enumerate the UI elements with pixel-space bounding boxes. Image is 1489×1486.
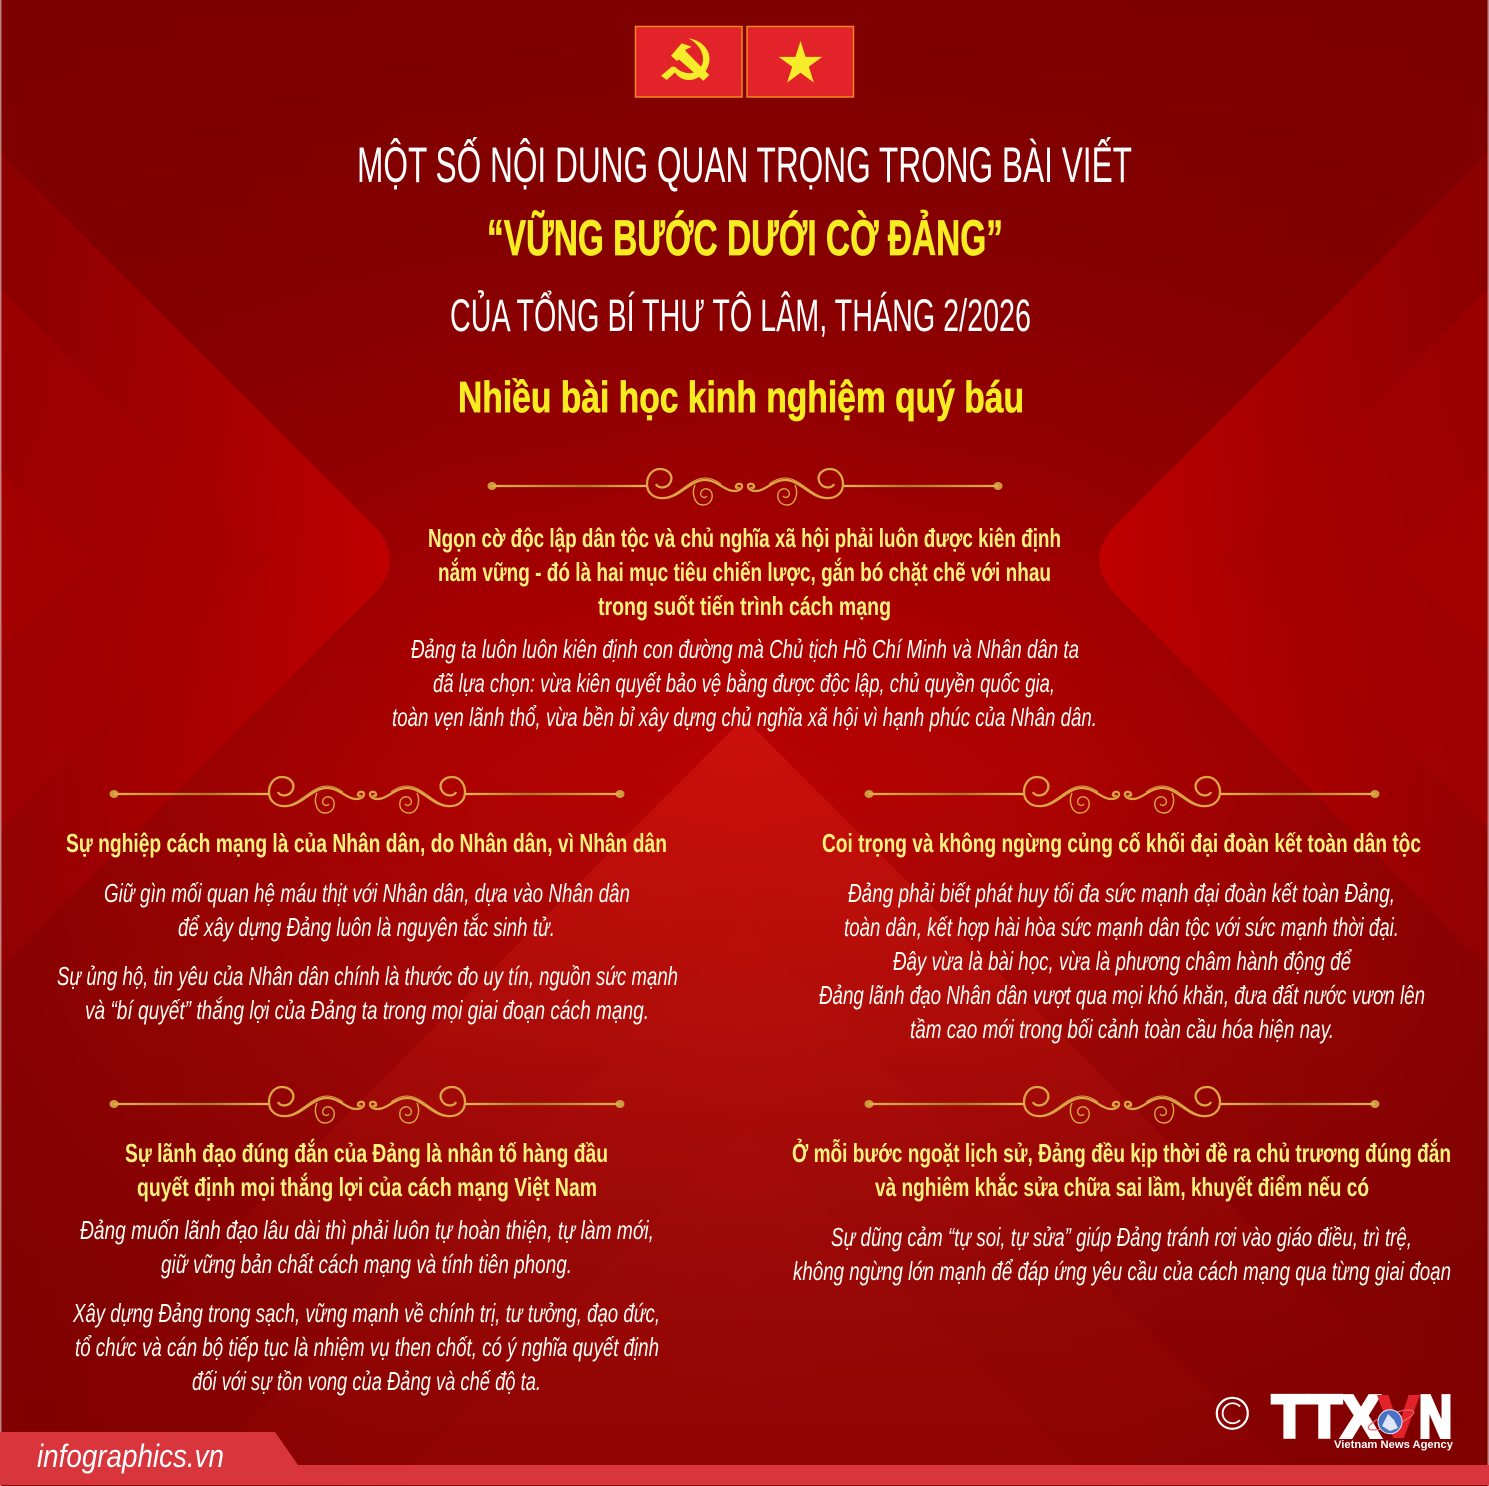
panel: lesson 4: [72, 1087, 660, 1396]
panel: lesson 4: tổ chức và cán bộ tiếp tục là nhiệm vụ then chốt, có ý nghĩa quyết định: [75, 1332, 659, 1362]
panel: lesson 1: đã lựa chọn: vừa kiên quyết bảo vệ bằng được độc lập, chủ quyền quốc gia,: [433, 668, 1055, 698]
panel: lesson 2: Sự ủng hộ, tin yêu của Nhân dân chính là thước đo uy tín, nguồn sức mạnh: [57, 961, 678, 991]
panel: lesson 4: Đảng muốn lãnh đạo lâu dài thì phải luôn tự hoàn thiện, tự làm mới,: [80, 1215, 654, 1245]
panel: lesson 2: [57, 777, 678, 1025]
panel: lesson 2: Sự nghiệp cách mạng là của Nhân dân, do Nhân dân, vì Nhân dân: [66, 828, 667, 858]
icon: party flag with hammer and sickle: [636, 26, 742, 97]
title: [357, 136, 1132, 341]
logo: TTXVN: N: [1419, 1384, 1452, 1450]
panel: lesson 3: [819, 777, 1425, 1044]
panel: lesson 1: [392, 469, 1097, 732]
panel: lesson 1: Ngọn cờ độc lập dân tộc và chủ nghĩa xã hội phải luôn được kiên định: [428, 523, 1061, 553]
panel: lesson 2: Giữ gìn mối quan hệ máu thịt với Nhân dân, dựa vào Nhân dân: [104, 878, 630, 908]
icon: national flag with star: [747, 26, 854, 97]
panel: lesson 2: và “bí quyết” thắng lợi của Đảng ta trong mọi giai đoạn cách mạng.: [85, 995, 649, 1025]
panel: lesson 1: toàn vẹn lãnh thổ, vừa bền bỉ xây dựng chủ nghĩa xã hội vì hạnh phúc của Nhân dân.: [392, 702, 1097, 732]
logo: TTXVN: TTX: [1272, 1384, 1380, 1450]
panel: lesson 4: Xây dựng Đảng trong sạch, vững mạnh về chính trị, tư tưởng, đạo đức,: [72, 1298, 660, 1328]
footer bar: [0, 1432, 1489, 1485]
title: “VỮNG BƯỚC DƯỚI CỜ ĐẢNG”: [487, 209, 1003, 266]
panel: lesson 4: quyết định mọi thắng lợi của cách mạng Việt Nam: [137, 1172, 597, 1202]
panel: lesson 4: đối với sự tồn vong của Đảng và chế độ ta.: [192, 1366, 541, 1396]
panel: lesson 5: [792, 1087, 1451, 1286]
panel: lesson 1: Đảng ta luôn luôn kiên định con đường mà Chủ tịch Hồ Chí Minh và Nhân dân ta: [411, 634, 1079, 664]
panel: lesson 1: nắm vững - đó là hai mục tiêu chiến lược, gắn bó chặt chẽ với nhau: [438, 557, 1051, 587]
logo: copyright symbol: [1217, 1398, 1248, 1429]
logo: TTXVN: V: [1378, 1384, 1419, 1450]
source label: infographics.vn: [37, 1438, 224, 1474]
title: CỦA TỔNG BÍ THƯ TÔ LÂM, THÁNG 2/2026: [450, 290, 1031, 341]
logo: TTXVN: Vietnam News Agency: [1334, 1439, 1454, 1451]
panel: lesson 3: tầm cao mới trong bối cảnh toàn cầu hóa hiện nay.: [910, 1014, 1334, 1044]
panel: lesson 4: Sự lãnh đạo đúng đắn của Đảng là nhân tố hàng đầu: [125, 1138, 608, 1168]
panel: lesson 4: giữ vững bản chất cách mạng và tính tiên phong.: [161, 1249, 572, 1279]
panel: lesson 2: để xây dựng Đảng luôn là nguyên tắc sinh tử.: [178, 912, 555, 942]
logo: TTXVN: [1272, 1384, 1454, 1451]
panel: lesson 1: trong suốt tiến trình cách mạng: [598, 591, 891, 621]
subtitle: Nhiều bài học kinh nghiệm quý báu: [458, 373, 1024, 422]
